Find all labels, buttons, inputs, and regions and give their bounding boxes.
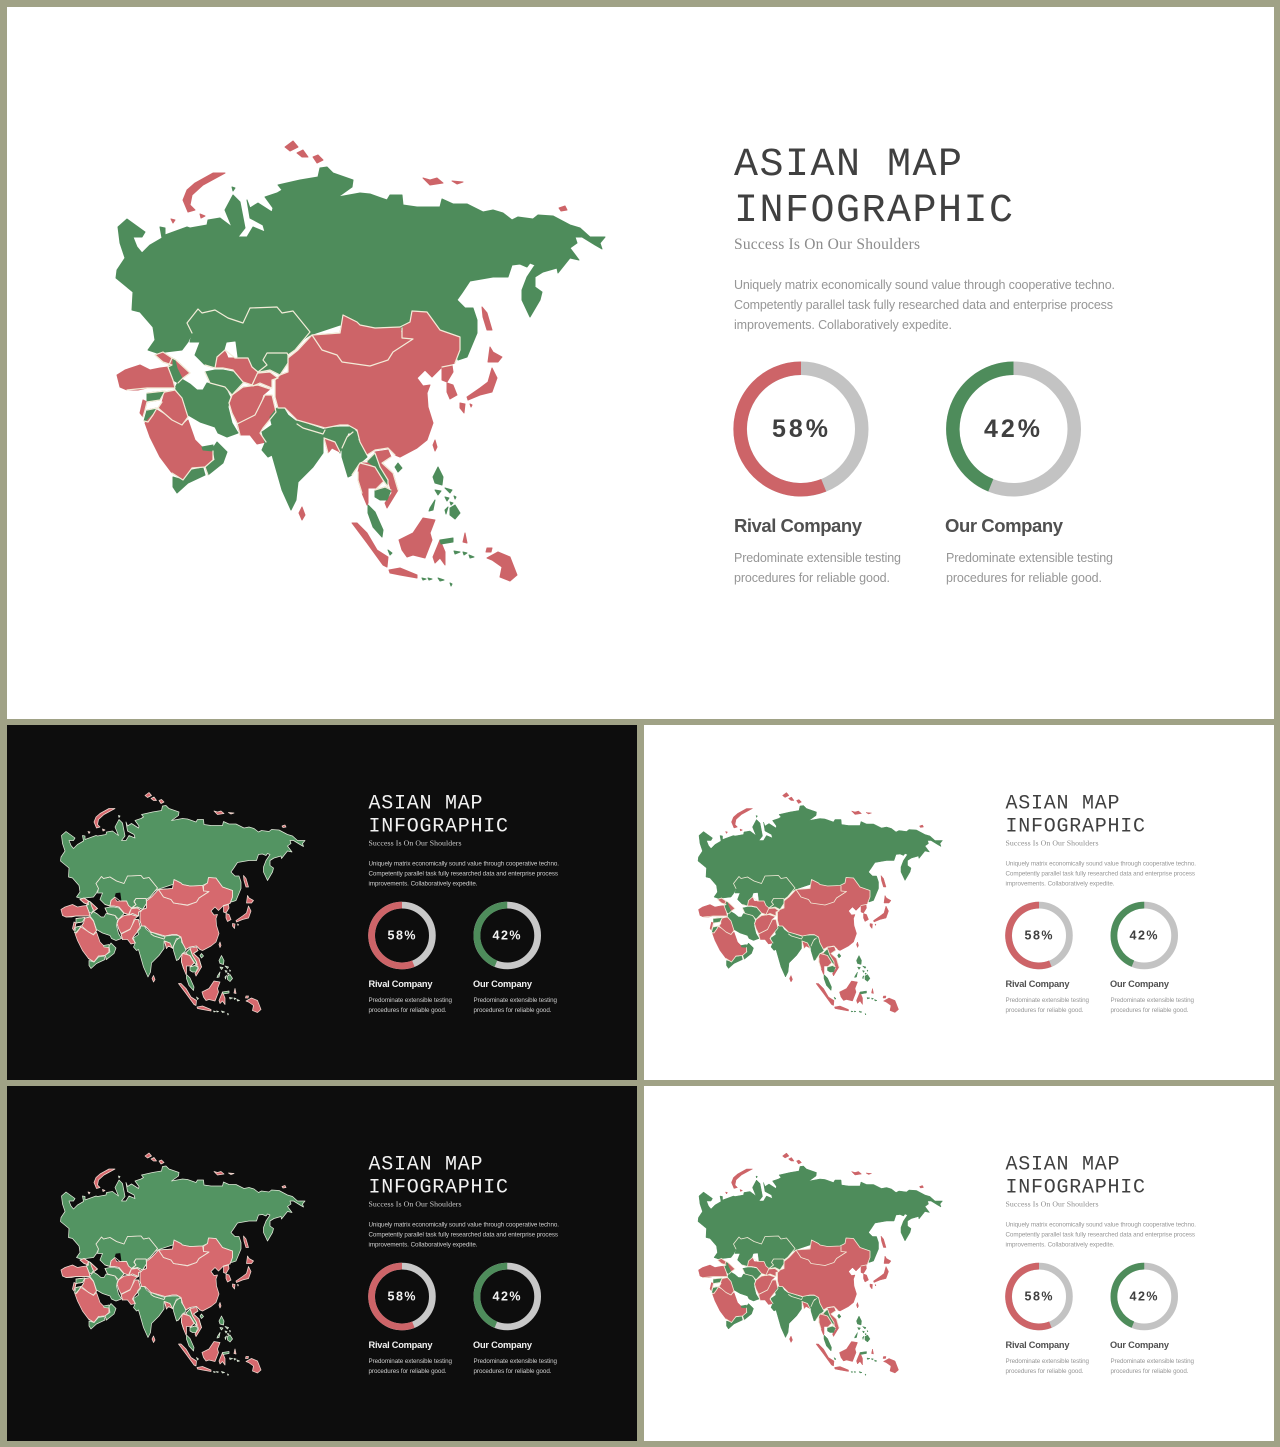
rival company text: Predominate extensible testing <box>1006 997 1090 1004</box>
donut chart: rival 58%: 58% <box>1024 1290 1052 1304</box>
rival company text <box>734 515 901 585</box>
map of Asia <box>60 1153 305 1376</box>
title: INFOGRAPHIC <box>368 816 509 838</box>
our company text: Predominate extensible testing <box>1110 1358 1195 1365</box>
our company text: procedures for reliable good. <box>1110 1368 1189 1375</box>
rival company text <box>368 979 453 1014</box>
map of Asia <box>116 141 605 586</box>
rival company text: Predominate extensible testing <box>368 1358 453 1365</box>
our company text: Predominate extensible testing <box>474 997 558 1004</box>
body text: Competently parallel task fully researched data and enterprise process <box>368 1232 558 1238</box>
donut chart: our 42% <box>953 368 1074 490</box>
subtitle: Success Is On Our Shoulders <box>368 838 462 848</box>
title: ASIAN MAP <box>368 1154 483 1176</box>
our company text <box>945 515 1113 585</box>
title <box>368 1154 509 1200</box>
our company text: Predominate extensible testing <box>946 551 1113 565</box>
donut chart: rival 58%: 58% <box>1024 928 1052 942</box>
rival company text <box>1006 1340 1090 1375</box>
map of Asia <box>698 1153 942 1376</box>
donut chart: our 42% <box>477 905 538 966</box>
subtitle: Success Is On Our Shoulders <box>368 1200 462 1208</box>
donut chart: our 42%: 42% <box>1130 1290 1158 1304</box>
text and charts <box>1006 1154 1196 1375</box>
rival company text <box>368 1340 453 1375</box>
body text <box>1006 1222 1196 1248</box>
body text: Uniquely matrix economically sound value through cooperative techno. <box>734 278 1115 292</box>
donut chart: rival 58% <box>372 1266 432 1327</box>
title <box>734 143 1015 234</box>
body text: Uniquely matrix economically sound value through cooperative techno. <box>368 860 559 868</box>
body text: Competently parallel task fully researched data and enterprise process <box>734 298 1113 312</box>
donut chart: our 42%: 42% <box>492 928 520 942</box>
title: INFOGRAPHIC <box>1006 816 1146 838</box>
rival company text: Rival Company <box>734 515 863 536</box>
our company text: procedures for reliable good. <box>1110 1007 1189 1014</box>
subtitle: Success Is On Our Shoulders <box>734 236 920 253</box>
title <box>1006 1154 1146 1200</box>
body text: Competently parallel task fully researched data and enterprise process <box>1006 870 1195 878</box>
title: ASIAN MAP <box>368 792 483 816</box>
panel: large white slide <box>7 7 1274 719</box>
title: ASIAN MAP <box>1006 1154 1120 1176</box>
panel: white slide top <box>644 725 1274 1080</box>
our company text: procedures for reliable good. <box>474 1368 552 1375</box>
body text: improvements. Collaboratively expedite. <box>368 880 478 888</box>
title <box>368 792 509 838</box>
our company text: Predominate extensible testing <box>474 1358 558 1365</box>
donut chart: our 42%: 42% <box>984 415 1040 443</box>
donut chart: our 42% <box>1114 1266 1175 1327</box>
text and charts <box>368 1154 559 1375</box>
body text <box>368 1222 559 1248</box>
rival company text <box>1006 979 1090 1014</box>
panel: dark slide bottom <box>7 1086 637 1441</box>
donut chart: rival 58% <box>1009 905 1069 966</box>
rival company text: Predominate extensible testing <box>368 997 453 1004</box>
title: INFOGRAPHIC <box>368 1176 509 1200</box>
donut chart: our 42%: 42% <box>492 1290 520 1304</box>
body text <box>368 860 559 888</box>
subtitle: Success Is On Our Shoulders <box>1006 838 1098 848</box>
rival company text: Predominate extensible testing <box>734 551 901 565</box>
rival company text: procedures for reliable good. <box>1006 1368 1084 1375</box>
donut chart: rival 58%: 58% <box>772 415 828 443</box>
our company text <box>1110 1340 1195 1375</box>
donut chart: rival 58% <box>372 905 432 966</box>
our company text <box>473 979 558 1014</box>
body text: improvements. Collaboratively expedite. <box>1006 1242 1115 1248</box>
title: INFOGRAPHIC <box>734 189 1015 234</box>
rival company text: procedures for reliable good. <box>368 1007 447 1014</box>
rival company text: Rival Company <box>368 1340 433 1350</box>
donut chart: rival 58%: 58% <box>388 928 416 942</box>
rival company text: Rival Company <box>1006 979 1070 989</box>
our company text: Our Company <box>1110 1340 1170 1350</box>
donut chart: rival 58% <box>1009 1266 1069 1327</box>
donut chart: our 42% <box>477 1266 538 1327</box>
our company text <box>473 1340 558 1375</box>
rival company text: procedures for reliable good. <box>1006 1007 1084 1014</box>
body text: Competently parallel task fully researched data and enterprise process <box>368 870 558 878</box>
body text <box>734 278 1115 332</box>
body text: improvements. Collaboratively expedite. <box>1006 880 1115 888</box>
text and charts <box>368 792 559 1014</box>
our company text: procedures for reliable good. <box>474 1007 552 1014</box>
map of Asia <box>698 792 942 1015</box>
title: ASIAN MAP <box>734 143 964 188</box>
rival company text: procedures for reliable good. <box>734 571 890 585</box>
donut chart: rival 58%: 58% <box>388 1290 416 1304</box>
body text: improvements. Collaboratively expedite. <box>734 318 952 332</box>
title: ASIAN MAP <box>1006 792 1120 816</box>
body text: improvements. Collaboratively expedite. <box>368 1242 478 1248</box>
rival company text: Rival Company <box>1006 1340 1070 1350</box>
donut chart: our 42%: 42% <box>1130 928 1158 942</box>
body text: Competently parallel task fully researched data and enterprise process <box>1006 1232 1195 1238</box>
our company text: procedures for reliable good. <box>946 571 1102 585</box>
body text: Uniquely matrix economically sound value through cooperative techno. <box>1006 1222 1196 1228</box>
our company text: Predominate extensible testing <box>1110 997 1195 1004</box>
our company text: Our Company <box>473 979 533 989</box>
title <box>1006 792 1146 838</box>
panel: white slide bottom <box>644 1086 1274 1441</box>
our company text: Our Company <box>473 1340 533 1350</box>
body text <box>1006 860 1196 888</box>
donut chart: rival 58% <box>740 368 862 490</box>
body text: Uniquely matrix economically sound value through cooperative techno. <box>1006 860 1196 868</box>
map of Asia <box>60 792 305 1015</box>
rival company text: Rival Company <box>368 979 433 989</box>
text and charts <box>1006 792 1196 1014</box>
subtitle: Success Is On Our Shoulders <box>1006 1200 1098 1208</box>
body text: Uniquely matrix economically sound value through cooperative techno. <box>368 1222 559 1228</box>
our company text: Our Company <box>945 515 1064 536</box>
our company text <box>1110 979 1195 1014</box>
title: INFOGRAPHIC <box>1006 1176 1146 1200</box>
panel: dark slide top <box>7 725 637 1080</box>
rival company text: Predominate extensible testing <box>1006 1358 1090 1365</box>
rival company text: procedures for reliable good. <box>368 1368 447 1375</box>
our company text: Our Company <box>1110 979 1170 989</box>
donut chart: our 42% <box>1114 905 1175 966</box>
